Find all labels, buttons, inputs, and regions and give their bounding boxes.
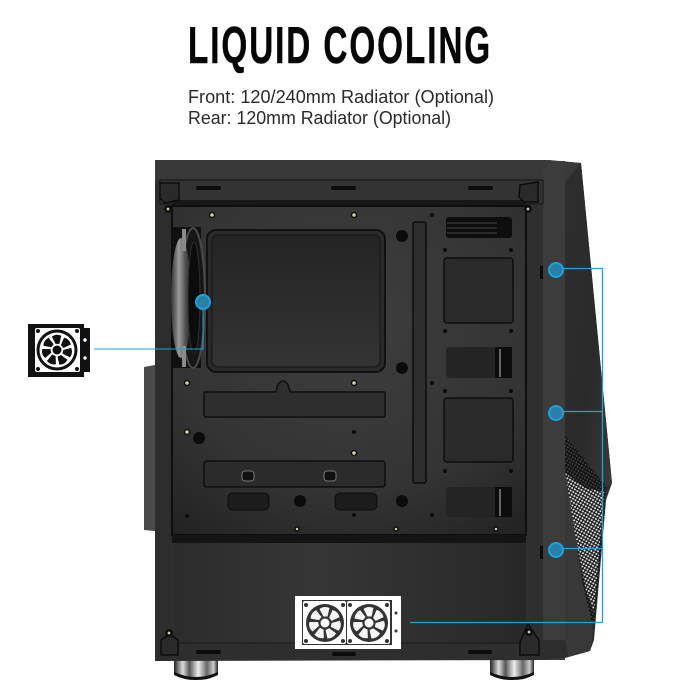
top slots bbox=[196, 186, 493, 210]
title: LIQUID COOLING bbox=[188, 17, 492, 75]
bright mesh bbox=[564, 472, 604, 612]
drive bay grille bbox=[446, 217, 512, 238]
radiator fan left bbox=[306, 604, 344, 642]
front marker dot top bbox=[549, 263, 563, 277]
drive opening bbox=[446, 347, 512, 378]
rear fan bbox=[171, 227, 205, 368]
front strip bbox=[543, 161, 565, 660]
bottom slots bbox=[196, 650, 492, 656]
top inner band bbox=[160, 180, 543, 204]
brass screws bbox=[184, 212, 498, 531]
radiator fan bbox=[36, 330, 78, 370]
icon: 120mm radiator bbox=[28, 324, 90, 377]
front callout lines bbox=[410, 268, 602, 622]
feet bbox=[174, 660, 534, 680]
PC case bbox=[144, 160, 612, 680]
corner brackets bbox=[160, 182, 539, 655]
rear marker dot bbox=[196, 295, 210, 309]
front angled facet bbox=[565, 163, 612, 487]
drive plate 1 bbox=[444, 258, 513, 323]
pillar slots bbox=[540, 266, 543, 559]
cable ties bbox=[242, 471, 336, 481]
lower front corner bbox=[565, 470, 593, 657]
rear callout lines bbox=[94, 305, 203, 349]
front marker dot middle bbox=[549, 406, 563, 420]
PSU shroud bbox=[172, 535, 526, 543]
dark mesh bbox=[564, 434, 606, 625]
subtitle text bbox=[188, 87, 494, 128]
cable tie plate bbox=[204, 461, 385, 487]
rear side tab bbox=[144, 365, 155, 531]
left pillar bbox=[155, 182, 172, 660]
cable channel bbox=[413, 222, 426, 483]
CPU cutout bbox=[207, 230, 385, 372]
icon: 240mm radiator bbox=[295, 596, 401, 649]
drive opening lower bbox=[446, 487, 512, 517]
top facet bbox=[543, 160, 581, 182]
case body bbox=[155, 160, 612, 661]
black standoffs bbox=[185, 213, 513, 518]
motherboard tray bbox=[172, 206, 526, 535]
radiator holes bbox=[304, 603, 398, 643]
drive plate 2 bbox=[444, 398, 513, 462]
radiator fan right bbox=[350, 604, 388, 642]
rear radiator spec: Rear: 120mm Radiator (Optional) bbox=[188, 108, 451, 128]
bottom band bbox=[172, 643, 543, 660]
right pillar bbox=[526, 203, 543, 660]
top panel bbox=[155, 160, 543, 180]
lower mounting plate with notch bbox=[204, 381, 385, 417]
corner screws bbox=[165, 206, 532, 636]
front marker dot bottom bbox=[549, 543, 563, 557]
front radiator spec: Front: 120/240mm Radiator (Optional) bbox=[188, 87, 494, 107]
cable openings bbox=[228, 493, 377, 510]
